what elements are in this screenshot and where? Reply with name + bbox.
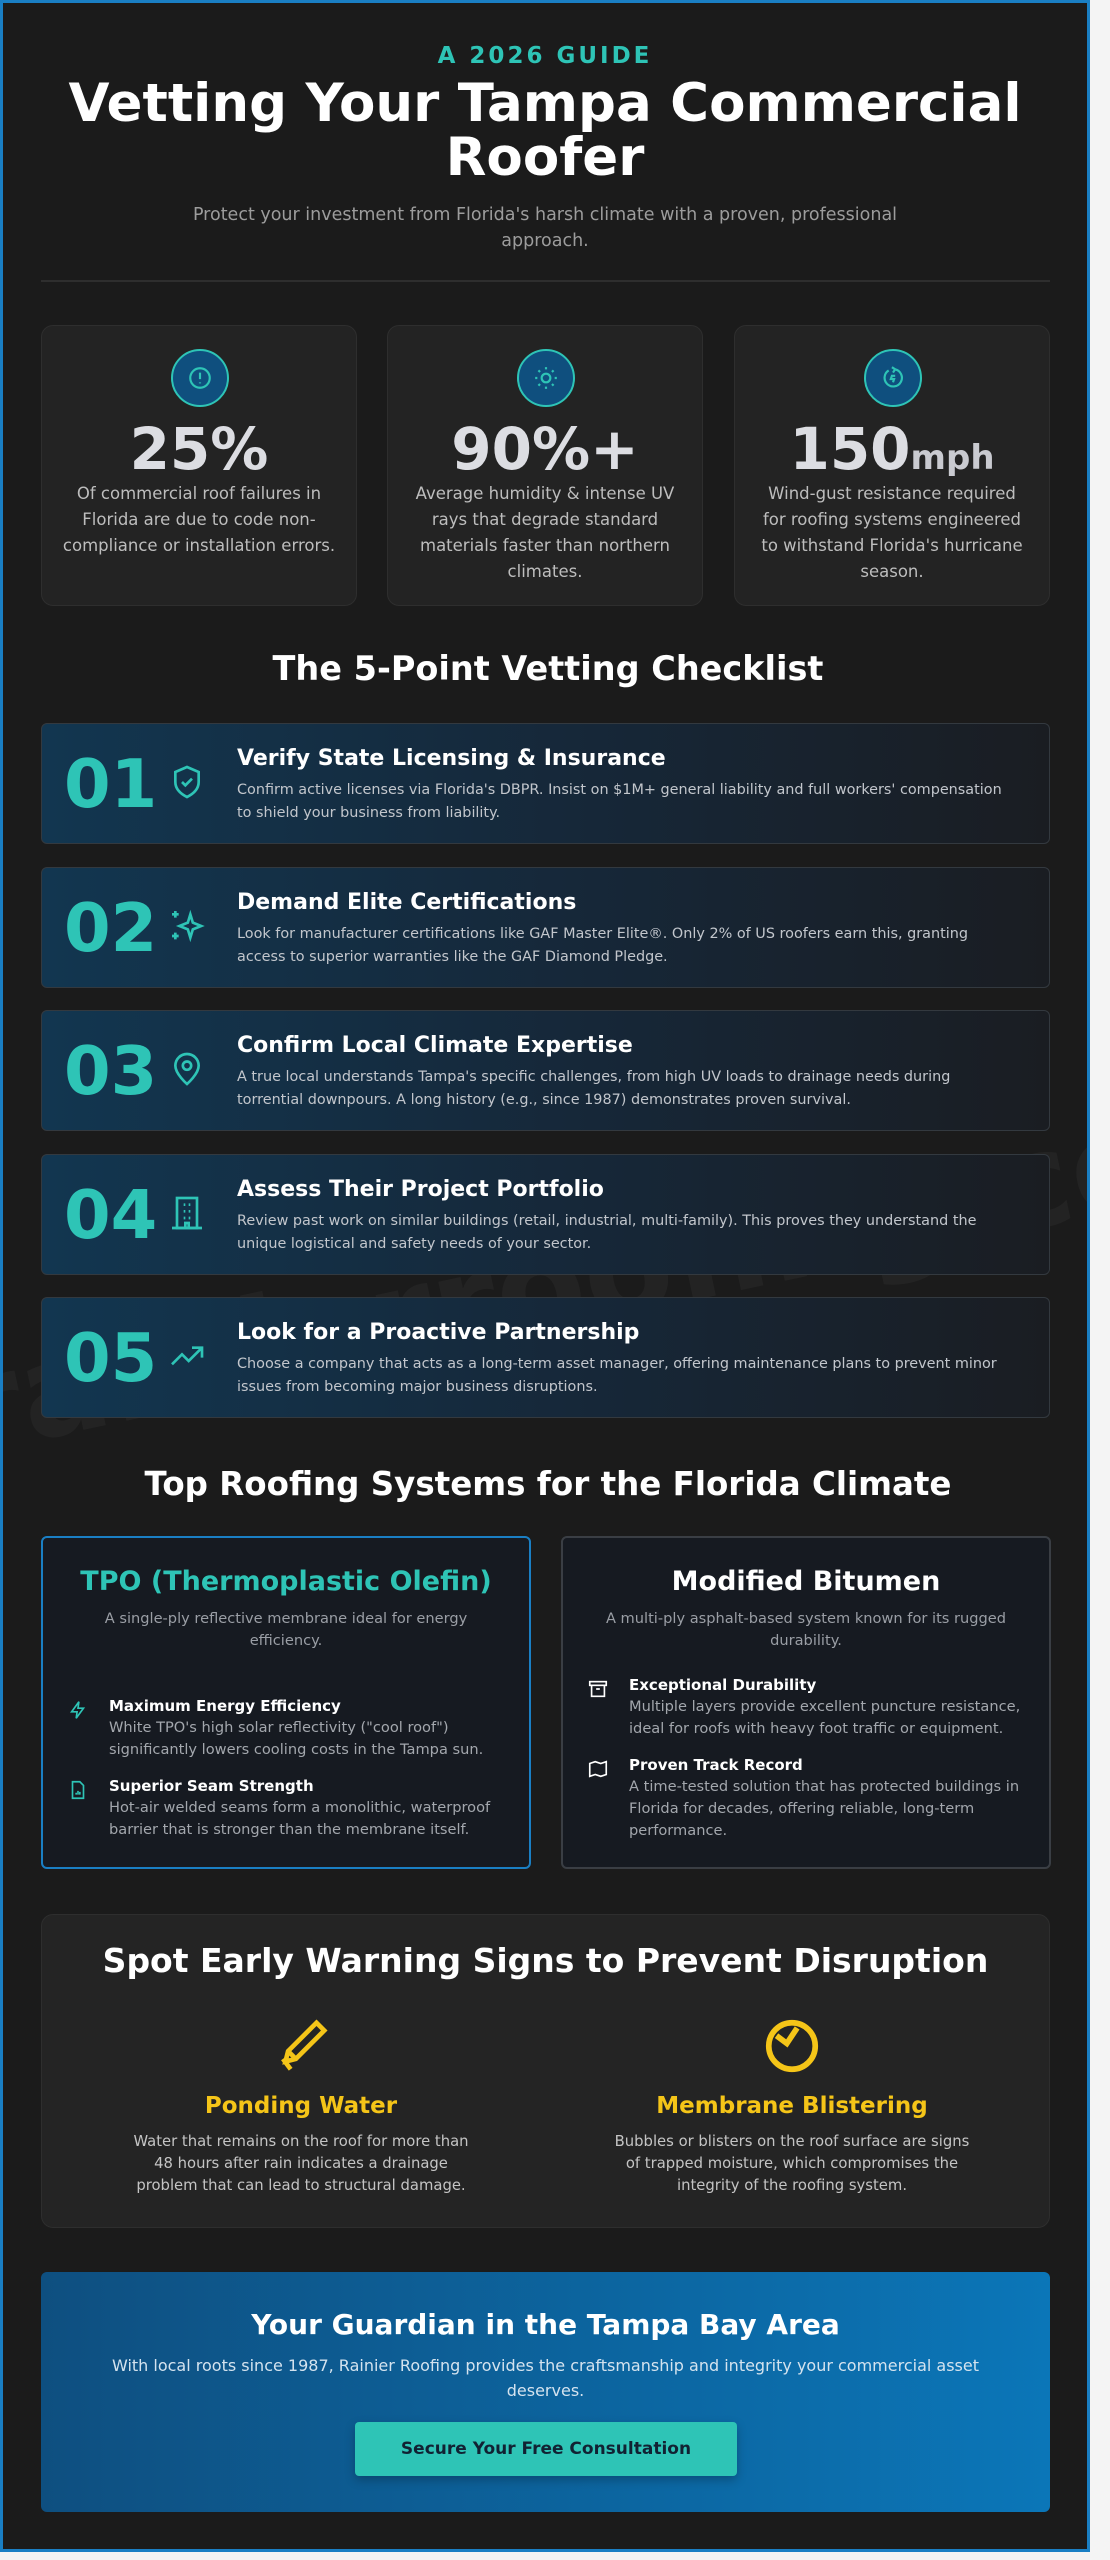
icon: sun bbox=[517, 349, 575, 407]
CTA button: Secure Your Free Consultation bbox=[401, 2439, 691, 2459]
feature: durability: Exceptional Durability bbox=[629, 1676, 816, 1694]
icon: wind bbox=[864, 349, 922, 407]
icon: trend bbox=[171, 1346, 204, 1366]
panel: warning signs bbox=[41, 1914, 1050, 2228]
icon: sparkles bbox=[172, 910, 204, 942]
item 05 bbox=[41, 1297, 1050, 1418]
icon: building bbox=[172, 1196, 202, 1230]
item 03: 03 bbox=[64, 1032, 157, 1110]
feature: track record: A time-tested solution that has protected buildings in Florida for decades, offering reliable, long-term performance. bbox=[629, 1778, 1019, 1839]
warning: ponding bbox=[133, 2020, 469, 2194]
warning: blistering: integrity of the roofing system. bbox=[677, 2177, 907, 2194]
feature: track record: Proven Track Record bbox=[629, 1756, 803, 1774]
item 01: 01 bbox=[64, 745, 157, 823]
stat card 2: Average humidity & intense UV rays that degrade standard materials faster than northern climates. bbox=[416, 484, 674, 581]
feature: seam: Hot-air welded seams form a monolithic, waterproof barrier that is stronger than the membrane itself. bbox=[109, 1799, 490, 1838]
feature: seam bbox=[72, 1777, 490, 1838]
feature: energy: Maximum Energy Efficiency bbox=[109, 1697, 341, 1715]
CTA heading: Your Guardian in the Tampa Bay Area bbox=[251, 2308, 840, 2341]
feature: energy bbox=[70, 1697, 483, 1758]
item 04 bbox=[41, 1154, 1050, 1275]
warning: ponding: Ponding Water bbox=[205, 2093, 397, 2119]
icon: alert bbox=[171, 349, 229, 407]
icon: shield bbox=[174, 766, 200, 798]
item 02: 02 bbox=[64, 889, 157, 967]
item 04: 04 bbox=[64, 1176, 157, 1254]
item 02: Look for manufacturer certifications like GAF Master Elite®. Only 2% of US roofers earn this, granting access to superior warranties like the GAF Diamond Pledge. bbox=[237, 926, 968, 965]
card: Modified Bitumen: A multi-ply asphalt-based system known for its rugged durability. bbox=[606, 1610, 1006, 1649]
item 05: 05 bbox=[64, 1319, 157, 1397]
item 04: Review past work on similar buildings (retail, industrial, multi-family). This proves they understand the unique logistical and safety needs of your sector. bbox=[237, 1213, 976, 1252]
CTA text: With local roots since 1987, Rainier Roofing provides the craftsmanship and integrity your commercial asset deserves. bbox=[112, 2356, 979, 2400]
warning: blistering: of trapped moisture, which compromises the bbox=[626, 2155, 958, 2172]
card: Modified Bitumen bbox=[561, 1536, 1051, 1869]
item 03: A true local understands Tampa's specific challenges, from high UV loads to drainage needs during torrential downpours. A long history (e.g., since 1987) demonstrates proven survival. bbox=[237, 1069, 950, 1108]
item 01: Verify State Licensing & Insurance bbox=[237, 746, 666, 771]
stat card 2: 90%+ bbox=[451, 415, 639, 483]
icon: blister bbox=[766, 2020, 818, 2072]
warning: ponding: 48 hours after rain indicates a drainage bbox=[154, 2155, 448, 2172]
item 05: Look for a Proactive Partnership bbox=[237, 1320, 639, 1345]
item 02: Demand Elite Certifications bbox=[237, 890, 576, 915]
card: Modified Bitumen: Modified Bitumen bbox=[672, 1566, 940, 1597]
panel: CTA bbox=[41, 2272, 1050, 2512]
stat card 1: 25% bbox=[130, 415, 268, 483]
stat card 3: 150mph bbox=[789, 415, 995, 483]
card: TPO bbox=[41, 1536, 531, 1869]
feature: durability: Multiple layers provide excellent puncture resistance, ideal for roofs with heavy foot traffic or equipment. bbox=[629, 1698, 1020, 1737]
warning: ponding: problem that can lead to structural damage. bbox=[136, 2177, 466, 2194]
stat card 1: Of commercial roof failures in Florida are due to code non-compliance or installation errors. bbox=[63, 484, 335, 555]
item 03: Confirm Local Climate Expertise bbox=[237, 1033, 633, 1058]
subtitle: Protect your investment from Florida's harsh climate with a proven, professional approach. bbox=[193, 205, 897, 251]
heading: warning: Spot Early Warning Signs to Prevent Disruption bbox=[103, 1941, 988, 1980]
icon: pen bbox=[281, 2020, 328, 2071]
warning: ponding: Water that remains on the roof for more than bbox=[133, 2133, 469, 2150]
card: TPO: A single-ply reflective membrane ideal for energy efficiency. bbox=[105, 1610, 467, 1649]
item 02 bbox=[41, 867, 1050, 988]
heading: roofing systems: Top Roofing Systems for the Florida Climate bbox=[144, 1465, 951, 1503]
feature: durability bbox=[588, 1676, 1020, 1737]
warning: blistering: Membrane Blistering bbox=[656, 2093, 928, 2119]
feature: seam: Superior Seam Strength bbox=[109, 1777, 314, 1795]
feature: energy: White TPO's high solar reflectivity ("cool roof") significantly lowers cooling costs in the Tampa sun. bbox=[109, 1719, 483, 1758]
stat card 3 bbox=[734, 325, 1050, 606]
title: Vetting Your Tampa Commercial Roofer bbox=[68, 73, 1022, 188]
feature: track record bbox=[588, 1756, 1019, 1839]
item 01 bbox=[41, 723, 1050, 844]
warning: blistering bbox=[615, 2020, 969, 2194]
item 05: Choose a company that acts as a long-term asset manager, offering maintenance plans to prevent minor issues from becoming major business disruptions. bbox=[237, 1356, 997, 1395]
stat card 2 bbox=[387, 325, 703, 606]
CTA button bbox=[355, 2422, 737, 2476]
stat card 3: Wind-gust resistance required for roofing systems engineered to withstand Florida's hurricane season. bbox=[761, 484, 1023, 581]
stat card 1 bbox=[41, 325, 357, 606]
card: TPO: TPO (Thermoplastic Olefin) bbox=[80, 1566, 492, 1597]
item 03 bbox=[41, 1010, 1050, 1131]
icon: pin bbox=[174, 1052, 200, 1086]
item 01: Confirm active licenses via Florida's DBPR. Insist on $1M+ general liability and full workers' compensation to shield your business from liability. bbox=[237, 782, 1002, 821]
eyebrow: A 2026 GUIDE bbox=[438, 43, 652, 69]
heading: checklist: The 5-Point Vetting Checklist bbox=[273, 649, 823, 688]
item 04: Assess Their Project Portfolio bbox=[237, 1177, 604, 1202]
warning: blistering: Bubbles or blisters on the roof surface are signs bbox=[615, 2133, 969, 2150]
